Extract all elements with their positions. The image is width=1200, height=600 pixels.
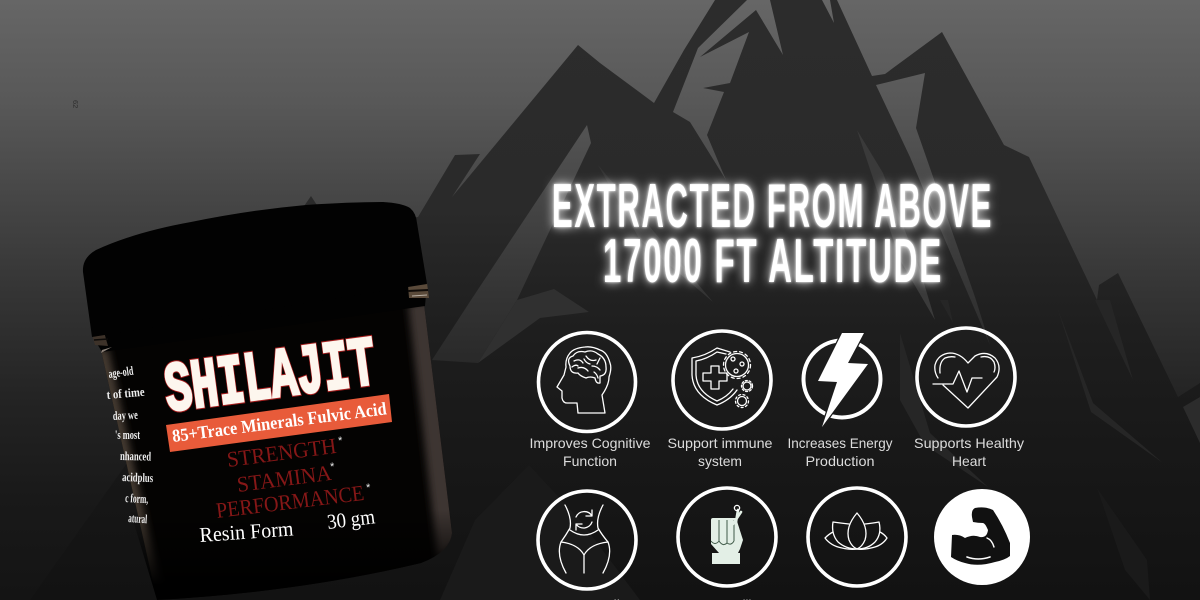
benefits list in red: STRENGTH <box>225 433 338 472</box>
orange band <box>166 394 392 452</box>
benefits list in red <box>215 433 371 523</box>
right crack <box>876 73 990 345</box>
label: Heart <box>952 453 986 469</box>
label: Function <box>563 453 617 469</box>
benefit: immune system <box>668 331 773 469</box>
title <box>552 172 993 296</box>
neck ring left <box>92 332 112 353</box>
jar body <box>101 304 452 600</box>
jar bottom shade <box>130 510 452 600</box>
benefits list in red: * <box>366 482 371 494</box>
faint lower cracks <box>440 465 1150 600</box>
label: Increases Energy <box>788 435 892 451</box>
brand name: SHILAJIT <box>160 326 381 433</box>
faint right cracks <box>900 300 1163 487</box>
side label text: atural <box>128 511 148 526</box>
icon: crossed fingers hand <box>678 488 776 586</box>
side label text: nhanced <box>120 449 151 464</box>
icon: shield and gears <box>673 331 771 429</box>
icon: waist with cycle arrows <box>538 491 636 589</box>
brand name: SHILAJIT: SHILAJIT <box>160 326 381 433</box>
band text: 85+Trace Minerals Fulvic Acid <box>171 398 388 446</box>
label: Supports Healthy <box>914 435 1024 451</box>
icon: lightning bolt <box>804 333 880 427</box>
benefits list in red: STAMINA <box>235 460 333 497</box>
lower left shard <box>478 289 589 363</box>
label <box>788 435 892 469</box>
side label text: acidplus <box>122 470 153 485</box>
label <box>914 435 1024 469</box>
form label: Resin Form <box>199 516 294 547</box>
label <box>668 435 773 469</box>
right wedge <box>1183 397 1200 443</box>
label <box>530 435 651 469</box>
benefit: metabolism / waist <box>529 491 651 600</box>
side label text: age-old <box>107 364 134 381</box>
benefit: fertility <box>666 488 776 600</box>
side label text: day we <box>112 408 138 423</box>
side label text: c form, <box>125 491 149 506</box>
side label text <box>106 364 153 526</box>
label: Support immune <box>668 435 773 451</box>
jar edge highlights <box>95 300 460 600</box>
centre sliver <box>857 130 935 320</box>
tiny mark: 62: 62 <box>71 100 80 108</box>
icon: flexed biceps <box>934 489 1030 585</box>
brand name: SHILAJIT: SHILAJIT <box>160 326 381 433</box>
neck ring right <box>408 283 429 298</box>
label: Improves Cognitive <box>530 435 651 451</box>
left wedge crack <box>432 125 591 363</box>
far left ridge <box>30 196 560 600</box>
main mountain mass <box>300 0 1200 600</box>
benefits list in red: * <box>338 435 343 447</box>
icon: head with brain <box>538 332 636 432</box>
side label text: 's most <box>115 428 141 442</box>
jar neck <box>92 283 427 352</box>
upper crack <box>673 0 783 180</box>
icon: heart with pulse <box>917 328 1015 426</box>
benefits list in red: * <box>330 461 335 473</box>
benefits list in red: PERFORMANCE <box>215 480 365 523</box>
weight label: 30 gm <box>326 504 376 534</box>
benefit: cognitive function <box>530 332 651 469</box>
side label text: t of time <box>106 385 146 402</box>
jar lid <box>83 202 427 337</box>
top sliver <box>822 0 834 23</box>
label: Production <box>806 453 874 469</box>
label: system <box>698 453 742 469</box>
benefit: healthy heart <box>914 328 1024 469</box>
benefit: energy <box>788 333 892 469</box>
icon: lotus flower <box>808 488 906 586</box>
centre shard behind title <box>598 165 713 302</box>
product jar <box>83 202 460 600</box>
